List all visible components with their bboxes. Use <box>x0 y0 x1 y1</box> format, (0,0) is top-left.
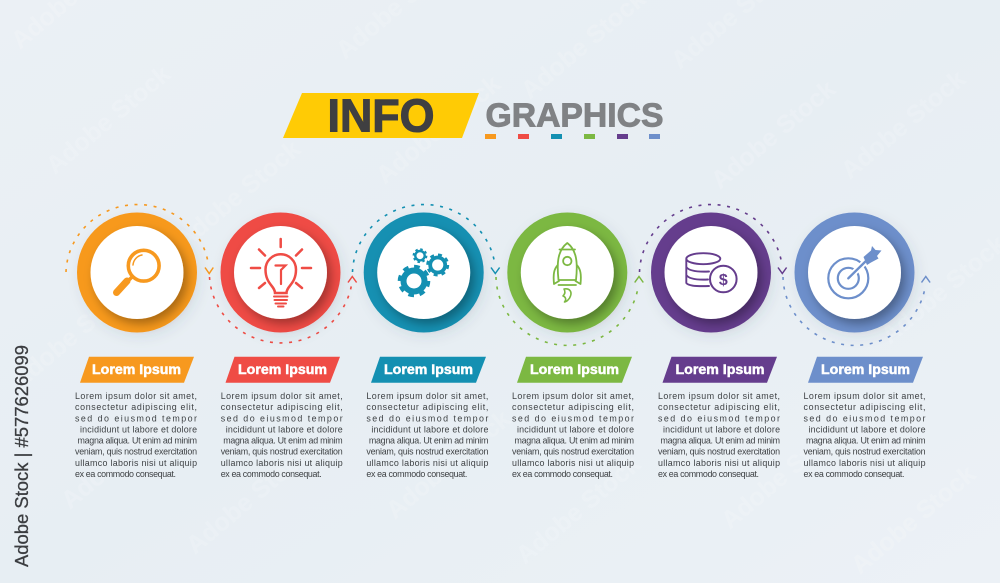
step 5 text <box>658 391 780 479</box>
step 4 banner <box>517 357 632 383</box>
step 2 banner <box>226 357 340 383</box>
step 3 text: incididunt ut labore et dolore <box>371 424 488 434</box>
step 5 text: incididunt ut labore et dolore <box>663 424 780 434</box>
step 5 text: ullamco laboris nisi ut aliquip <box>658 458 780 468</box>
step 5 text: magna aliqua. Ut enim ad minim <box>660 436 780 446</box>
disc 1 <box>90 226 184 319</box>
step 6 banner <box>808 357 923 383</box>
step 3 text: sed do eiusmod tempor <box>366 414 488 424</box>
ring 4 <box>507 212 627 332</box>
ring 5 <box>651 212 771 332</box>
step 1 text: Lorem ipsum dolor sit amet, <box>75 391 197 401</box>
disc 3 <box>377 226 470 319</box>
dotted arc 1 <box>66 205 213 274</box>
step 1 text: incididunt ut labore et dolore <box>80 424 197 434</box>
step 3 text: ullamco laboris nisi ut aliquip <box>366 458 488 468</box>
step 2 text: Lorem ipsum dolor sit amet, <box>221 391 343 401</box>
step 1 text: sed do eiusmod tempor <box>75 414 197 424</box>
step 3 text: consectetur adipiscing elit, <box>366 402 488 412</box>
icon: dart target <box>828 246 882 298</box>
step 4 text: consectetur adipiscing elit, <box>512 402 634 412</box>
step 4 text: Lorem ipsum dolor sit amet, <box>512 391 634 401</box>
step 4 text <box>512 391 634 479</box>
step 6 text <box>804 391 926 479</box>
disc 2 <box>234 226 327 319</box>
step 2 text: ullamco laboris nisi ut aliquip <box>221 458 343 468</box>
step 6 text: ullamco laboris nisi ut aliquip <box>804 458 926 468</box>
step 6 text: sed do eiusmod tempor <box>804 414 926 424</box>
step 4 text: magna aliqua. Ut enim ad minim <box>514 436 634 446</box>
dotted arc 5 <box>640 205 787 274</box>
watermark: Adobe Stock <box>381 405 516 525</box>
disc 5 <box>664 226 758 319</box>
ring 1 <box>77 212 197 332</box>
ring 2 <box>220 212 340 332</box>
step 4: rocket, green <box>496 212 643 345</box>
ring 6 <box>794 212 914 332</box>
icon: rocket <box>554 243 581 302</box>
icon: magnifying glass <box>116 250 159 292</box>
step 2 text: ex ea commodo consequat. <box>221 469 322 479</box>
watermark: Adobe Stock <box>511 450 646 570</box>
watermark: Adobe Stock <box>846 460 981 580</box>
step 2 banner: Lorem Ipsum <box>238 361 327 377</box>
step 5 banner <box>662 357 777 383</box>
step 1 text: veniam, quis nostrud exercitation <box>75 446 197 456</box>
step 3: gears, blue <box>352 205 500 332</box>
watermark: Adobe Stock <box>181 440 316 560</box>
step 6 text: magna aliqua. Ut enim ad minim <box>806 436 926 446</box>
step 5 text: Lorem ipsum dolor sit amet, <box>658 391 780 401</box>
step 6 text: Lorem ipsum dolor sit amet, <box>804 391 926 401</box>
step 1 text <box>75 391 197 479</box>
disc 6 <box>808 226 901 319</box>
dotted arc 2 <box>210 276 357 343</box>
step 4 text: veniam, quis nostrud exercitation <box>512 446 634 456</box>
icon: light bulb <box>251 239 311 306</box>
step 2 text: veniam, quis nostrud exercitation <box>221 446 343 456</box>
step 3 text: magna aliqua. Ut enim ad minim <box>369 436 488 446</box>
step 1 text: consectetur adipiscing elit, <box>75 402 197 412</box>
dotted arc 6 <box>783 276 930 345</box>
watermark: Adobe Stock <box>56 395 191 515</box>
step 1: magnifier, orange <box>66 205 213 332</box>
step 3 text: ex ea commodo consequat. <box>366 469 467 479</box>
step 3 text: veniam, quis nostrud exercitation <box>366 446 488 456</box>
step 2 text: magna aliqua. Ut enim ad minim <box>223 436 343 446</box>
step 2 text: consectetur adipiscing elit, <box>221 402 343 412</box>
watermark: Adobe Stock <box>706 75 841 195</box>
step 1 banner: Lorem Ipsum <box>92 361 181 377</box>
step 6 text: veniam, quis nostrud exercitation <box>804 446 926 456</box>
step 1 text: ullamco laboris nisi ut aliquip <box>75 458 197 468</box>
step 6 text: consectetur adipiscing elit, <box>804 402 926 412</box>
step 2 text: sed do eiusmod tempor <box>221 414 343 424</box>
step 5 text: consectetur adipiscing elit, <box>658 402 780 412</box>
step 3 banner <box>371 357 486 383</box>
step 1 text: ex ea commodo consequat. <box>75 469 176 479</box>
title: GRAPHICS word with colour dashes: GRAPHICS <box>486 98 664 134</box>
step 1 banner <box>80 357 194 383</box>
icon: coin stack: $ <box>719 272 728 289</box>
icon: gears <box>400 249 448 295</box>
step 6 banner: Lorem Ipsum <box>821 361 910 377</box>
step 3 text <box>366 391 488 479</box>
step 1 text: magna aliqua. Ut enim ad minim <box>78 436 197 446</box>
vertical stock id text: Adobe Stock | #577626099 <box>11 345 32 567</box>
step 5: coins, purple <box>640 205 787 332</box>
step 5 text: ex ea commodo consequat. <box>658 469 759 479</box>
watermark: Adobe Stock <box>836 65 971 185</box>
step 2: light bulb, red <box>210 212 357 343</box>
step 2 text: incididunt ut labore et dolore <box>226 424 343 434</box>
watermark: Adobe Stock <box>6 275 141 395</box>
step 5 banner: Lorem Ipsum <box>676 361 764 377</box>
step 5 text: veniam, quis nostrud exercitation <box>658 446 780 456</box>
step 4 text: ex ea commodo consequat. <box>512 469 613 479</box>
disc 4 <box>521 226 614 319</box>
watermark: Adobe Stock <box>41 60 176 180</box>
step 3 banner: Lorem Ipsum <box>384 361 473 377</box>
step 4 text: incididunt ut labore et dolore <box>517 424 634 434</box>
dotted arc 3 <box>352 205 500 274</box>
watermark: Adobe Stock <box>171 135 306 255</box>
step 4 text: sed do eiusmod tempor <box>512 414 634 424</box>
dotted arc 4 <box>496 276 643 345</box>
step 3 text: Lorem ipsum dolor sit amet, <box>366 391 488 401</box>
step 4 text: ullamco laboris nisi ut aliquip <box>512 458 634 468</box>
step 6 text: ex ea commodo consequat. <box>804 469 904 479</box>
step 6 text: incididunt ut labore et dolore <box>808 424 926 434</box>
icon: coin stack <box>686 253 737 292</box>
step 6: target, periwinkle <box>783 212 930 345</box>
step 2 text <box>221 391 343 479</box>
title: INFO banner: INFO <box>328 90 434 142</box>
watermark: Adobe Stock <box>371 70 506 190</box>
ring 3 <box>364 212 484 332</box>
step 5 text: sed do eiusmod tempor <box>658 414 780 424</box>
step 4 banner: Lorem Ipsum <box>530 361 619 377</box>
title: INFO banner <box>283 90 479 142</box>
watermark: Adobe Stock <box>716 415 851 535</box>
